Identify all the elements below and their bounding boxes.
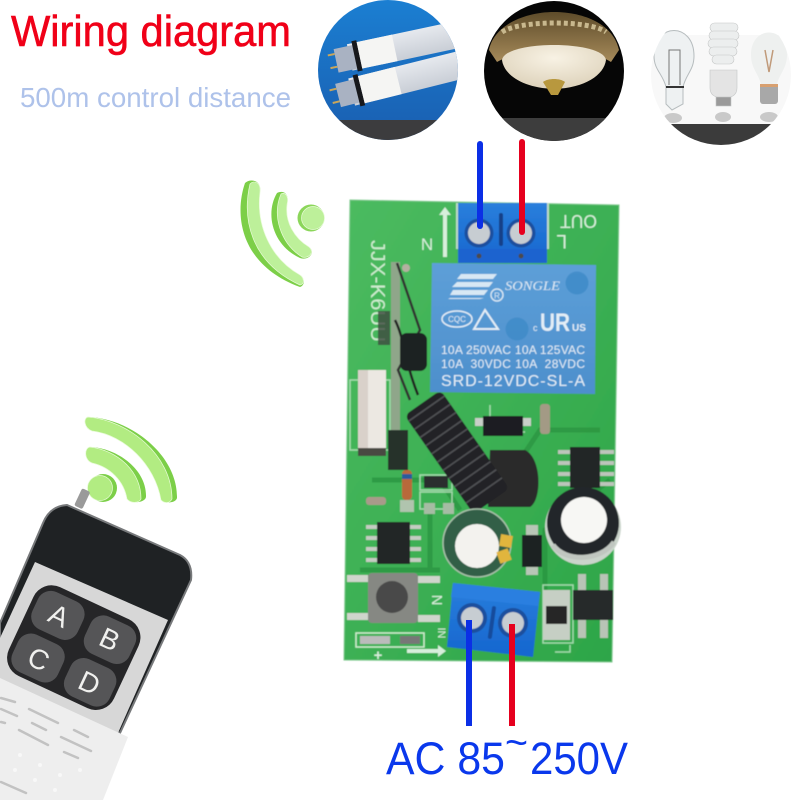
rectifier diode (522, 525, 542, 575)
capacitor right (545, 487, 621, 565)
button A (27, 586, 89, 645)
antenna coil (405, 390, 509, 514)
tactile push button (347, 573, 440, 623)
relay: SONGLE (505, 279, 560, 293)
input voltage label (386, 721, 628, 784)
button B (79, 611, 141, 669)
bottom terminal block (447, 583, 540, 657)
white sleeve (0, 678, 128, 800)
compact fluorescent bulb (708, 23, 739, 106)
button pad (0, 579, 147, 717)
top terminal block (456, 203, 549, 263)
antenna module (378, 262, 427, 467)
pcb base (344, 200, 619, 662)
relay: 10A 30VDC 10A 28VDC (441, 357, 585, 371)
button A: A (44, 598, 74, 634)
relay: 10A 250VAC 10A 125VAC (441, 343, 585, 357)
photo circle: light bulbs (654, 22, 787, 145)
photo circle: fluorescent tubes (318, 0, 458, 140)
relay (430, 263, 596, 394)
regulator and inductor (543, 574, 613, 640)
power inductor (488, 450, 538, 507)
remote control (0, 488, 191, 800)
button C: C (23, 641, 54, 678)
songle logo (448, 274, 497, 299)
remote body (0, 505, 191, 733)
clear bulb (751, 32, 787, 104)
silkscreen labels bottom: IN (435, 628, 447, 639)
button B: B (95, 622, 125, 657)
receiver circuit board (344, 200, 621, 664)
icon: signal waves beside module (241, 180, 324, 287)
relay: UR (540, 309, 570, 337)
antenna tip (74, 488, 90, 509)
title: Wiring diagram (11, 7, 291, 56)
capacitor left (443, 509, 513, 577)
input voltage label: ~ (505, 721, 528, 765)
silkscreen labels top: N (421, 235, 433, 254)
wires: output neutral and live (477, 139, 525, 235)
silkscreen labels top: L (556, 230, 567, 251)
relay: SRD-12VDC-SL-A (441, 373, 585, 390)
input voltage label: 250V (530, 733, 628, 784)
relay: CQC (448, 315, 466, 324)
relay: US (572, 323, 586, 334)
silkscreen labels bottom (356, 595, 447, 664)
small diode and resistors (366, 470, 454, 514)
input voltage label: AC 85 (386, 733, 505, 784)
subtitle: control distance: 500m control distance (20, 82, 291, 113)
photo circle: ceiling lamp (484, 0, 624, 145)
silkscreen labels bottom: + (374, 647, 383, 664)
crystal (358, 370, 408, 470)
silkscreen labels top: JJX-K6UU (366, 240, 388, 342)
silver panel (0, 562, 168, 733)
chip right (558, 447, 614, 488)
silkscreen labels top (366, 207, 597, 342)
chip left (366, 522, 421, 564)
incandescent bulb (654, 30, 694, 110)
relay: c (533, 323, 538, 333)
button D (59, 653, 121, 711)
silkscreen labels bottom: N (428, 595, 445, 605)
icon: signal waves above remote (85, 417, 177, 503)
button C (7, 629, 69, 687)
small transistor (475, 404, 550, 436)
relay: R (494, 292, 500, 300)
silkscreen labels top: OUT (560, 211, 597, 231)
button D: D (74, 665, 105, 701)
wires: input neutral and live (466, 620, 515, 726)
